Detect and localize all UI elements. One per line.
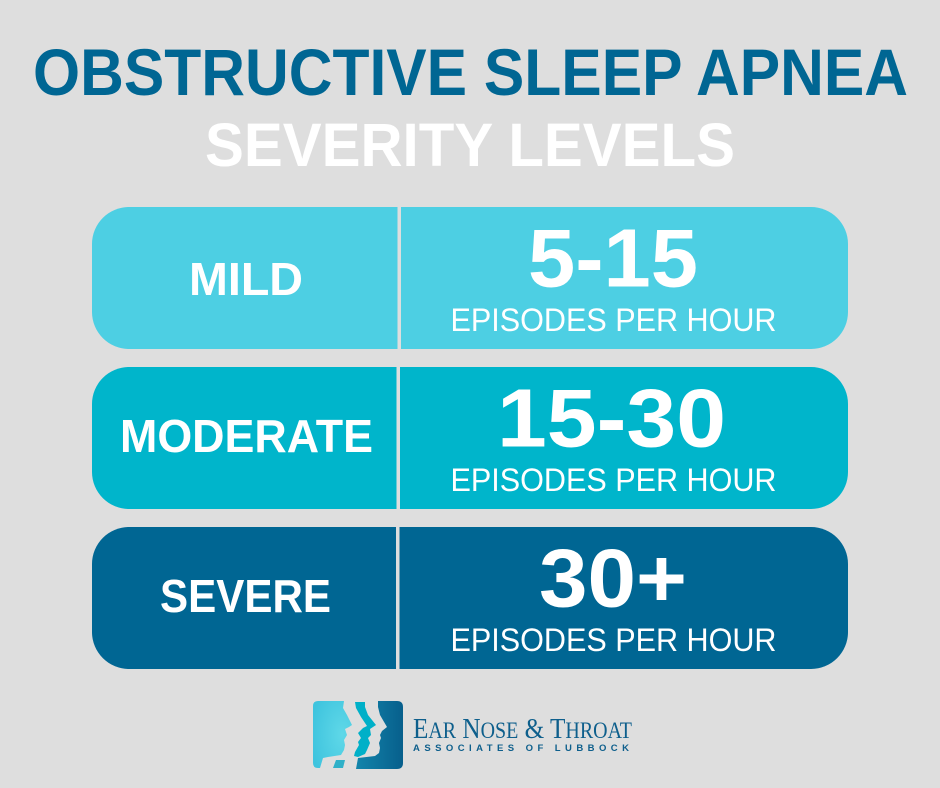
panel: mild [92,207,848,349]
caption: episodes per hour: EPISODES PER HOUR [450,302,776,338]
logo name: EAR NOSE & THROAT [413,713,632,745]
icon: three face profiles [313,701,403,769]
caption: episodes per hour: EPISODES PER HOUR [450,622,776,658]
value: 5-15: 5-15 [528,212,698,304]
label: severe: SEVERE [160,570,331,622]
panel: moderate [92,367,848,509]
caption: episodes per hour: EPISODES PER HOUR [450,462,776,498]
label: moderate: MODERATE [120,410,373,462]
label: mild: MILD [189,253,303,305]
logo tagline: ASSOCIATES OF LUBBOCK [413,743,629,754]
logo [313,701,632,769]
value: 30+: 30+ [539,532,687,624]
title [33,35,908,179]
subtitle: SEVERITY LEVELS [205,111,735,179]
panel: severe [92,527,848,669]
value: 15-30: 15-30 [497,372,726,464]
